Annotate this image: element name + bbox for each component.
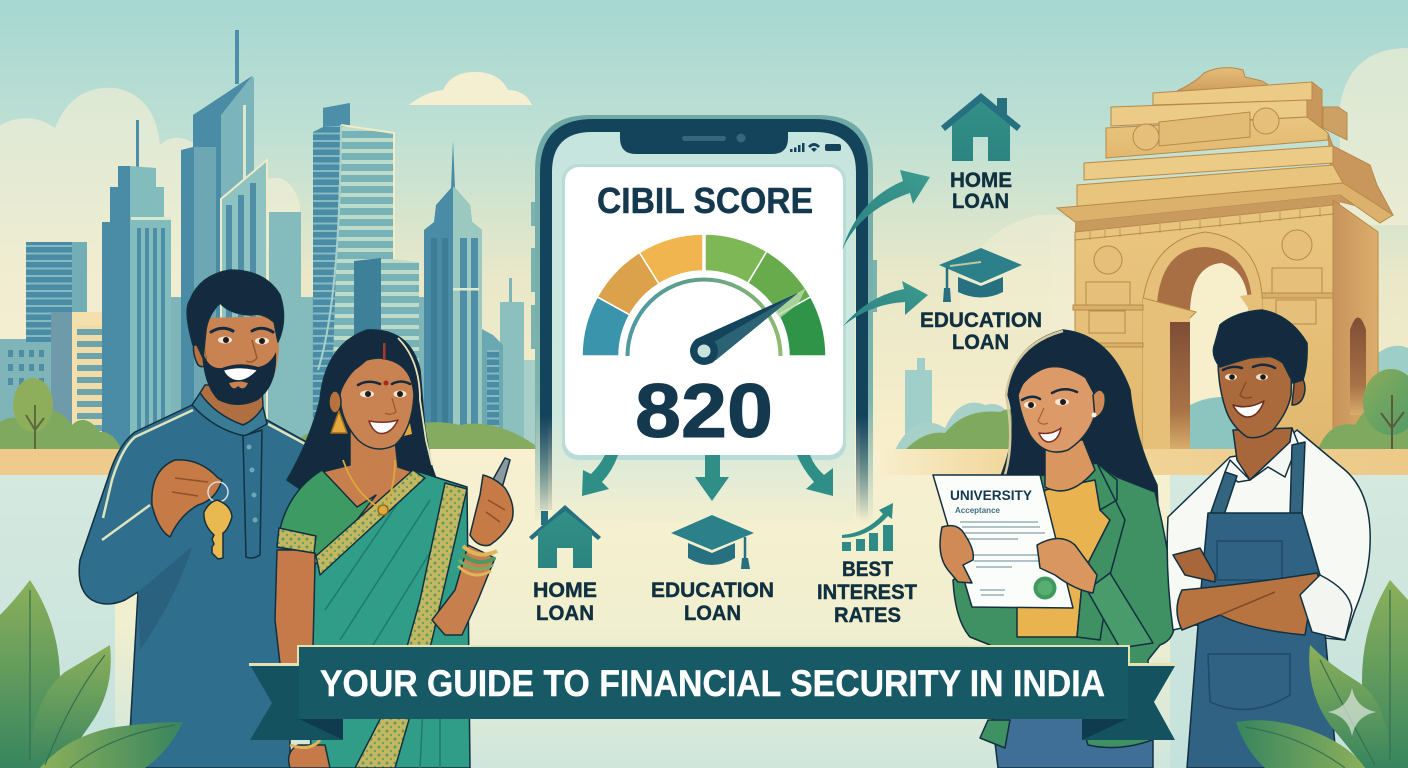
student: eyes — [1024, 398, 1069, 408]
banner: cream edge — [249, 645, 1175, 666]
woman: blouse trim — [277, 528, 316, 553]
gate: right panel details — [1262, 230, 1333, 324]
leaf: low — [1236, 720, 1365, 768]
gate: right pier — [1240, 293, 1262, 449]
gate: left pier — [1143, 298, 1196, 449]
building: cream block — [51, 312, 121, 450]
label: RATES — [834, 604, 901, 627]
apron man: neck — [1233, 428, 1292, 480]
phone: side buttons — [531, 202, 877, 349]
phone: outer frame — [535, 115, 873, 525]
building: tall angled tower — [181, 30, 267, 450]
apron man: smile — [1233, 401, 1264, 417]
label: EDUCATION — [920, 309, 1042, 332]
student: acceptance letter — [933, 475, 1073, 608]
gate: left panel details — [1073, 246, 1143, 347]
person: woman in saree — [275, 330, 513, 768]
leaf: middle — [30, 645, 111, 768]
heading: CIBIL SCORE: CIBIL SCORE — [597, 180, 813, 221]
woman: saree — [310, 470, 470, 768]
building: far right tower — [905, 358, 932, 440]
gate: side of upper tiers — [1328, 133, 1393, 215]
man: placket with buttons — [243, 430, 262, 558]
arrow: to interest rates below — [797, 455, 833, 496]
phone: dark bezel — [540, 119, 868, 520]
icon: gold key — [204, 500, 232, 559]
man: smile — [223, 368, 258, 381]
apron man: brows — [1223, 365, 1275, 370]
student: neck — [1045, 440, 1095, 491]
label — [651, 579, 774, 625]
woman: lower hand and bangles — [289, 740, 330, 768]
item: education loan upper — [920, 248, 1042, 354]
woman: smile — [369, 420, 398, 433]
apron man: nose — [1240, 382, 1252, 398]
gate: main body front — [1075, 205, 1333, 449]
building: small right blocks — [482, 278, 536, 452]
label — [920, 309, 1042, 354]
gauge — [582, 234, 826, 365]
icon: graduation cap — [671, 515, 754, 569]
student: ear — [1092, 390, 1105, 418]
student: jacket body — [953, 463, 1175, 700]
score card — [562, 164, 846, 460]
score value: 820: 820 — [635, 369, 773, 454]
gate: main body side — [1333, 200, 1378, 449]
leaf: low — [40, 722, 183, 768]
phone with CIBIL score — [531, 115, 877, 525]
building: tall slab tower — [313, 103, 394, 450]
city skyline — [0, 30, 536, 452]
ground: right sand band — [880, 449, 1408, 475]
woman: right arm — [432, 545, 495, 635]
student: sleeve — [1087, 573, 1153, 648]
label: INTEREST — [817, 581, 917, 604]
banner: main strip — [299, 647, 1128, 719]
student: left hand — [940, 526, 973, 583]
apron man: lower pocket — [1208, 654, 1290, 710]
banner: right tail — [1082, 666, 1175, 740]
apron man: eyes — [1225, 374, 1268, 380]
building: stepped tower — [102, 120, 171, 450]
student: face — [1018, 352, 1097, 452]
student: brows — [1022, 389, 1077, 400]
banner: folds — [299, 719, 1127, 740]
woman: nose — [385, 398, 396, 414]
bush: centre right — [905, 409, 1025, 450]
student: right lapel — [1077, 463, 1125, 640]
label: EDUCATION — [651, 579, 774, 602]
item: home loan upper — [941, 93, 1021, 213]
student: hair highlight — [1005, 331, 1063, 475]
man: ear — [193, 332, 207, 367]
arrow: to home loan below — [582, 455, 618, 496]
label: LOAN — [952, 190, 1009, 213]
ground: right field — [1150, 475, 1408, 768]
building: striped block — [26, 242, 87, 342]
student: smile — [1039, 428, 1061, 442]
letter: green seal — [1034, 576, 1056, 600]
hills and trees — [0, 358, 1408, 450]
man: shoulder piping — [102, 410, 307, 540]
banner: title text: YOUR GUIDE TO FINANCIAL SECURITY IN INDIA — [320, 663, 1105, 704]
watermark star — [1328, 688, 1376, 736]
gate: back side block — [1323, 107, 1347, 140]
apron man: face — [1218, 355, 1292, 438]
building: far left block — [0, 339, 60, 450]
gate: cornice — [1057, 183, 1393, 223]
label: LOAN — [684, 602, 741, 625]
gate: backdrop hills — [1370, 346, 1408, 449]
apron man: bib pocket — [1217, 541, 1282, 580]
woman: parting and bindi — [383, 343, 388, 386]
bush: left — [0, 410, 122, 450]
woman: saree folds — [325, 500, 450, 768]
woman: brows — [358, 382, 410, 385]
man: beard — [202, 350, 276, 405]
man: eyes — [218, 336, 269, 344]
man: face — [204, 316, 279, 403]
label: LOAN — [536, 602, 594, 625]
gate: central arch — [1143, 232, 1262, 449]
label: HOME — [533, 579, 597, 602]
man: nose — [246, 340, 257, 362]
item: home loan lower — [529, 505, 601, 625]
letter: subheading: Acceptance — [955, 506, 1001, 515]
phone: screen — [552, 132, 855, 525]
bush: right — [1318, 395, 1408, 449]
building: rear tower — [269, 212, 312, 450]
label: BEST — [842, 558, 893, 581]
tree: left — [13, 378, 53, 450]
label — [533, 579, 597, 625]
apron man: rolled sleeve — [1300, 575, 1352, 640]
arrow: to home loan right — [842, 170, 930, 250]
label: LOAN — [952, 331, 1009, 354]
ground: left field — [0, 475, 200, 768]
building: spired tower — [424, 140, 482, 450]
man: kurta shading — [138, 548, 192, 650]
item: education loan lower — [651, 515, 774, 625]
leaf: middle — [1309, 645, 1390, 768]
apron man: hair — [1213, 310, 1307, 383]
student: yellow top — [1017, 480, 1110, 637]
hill: centre right — [895, 403, 1012, 450]
apron man: ear — [1292, 375, 1305, 405]
student: nose — [1038, 408, 1048, 424]
man: collar — [192, 393, 267, 436]
person: man with house key — [79, 270, 312, 768]
icon: house — [529, 505, 601, 568]
leaf: tall — [1362, 580, 1408, 768]
woman: eyes — [360, 390, 406, 398]
leaf: tall — [0, 580, 60, 768]
foliage: bottom left leaves — [0, 580, 183, 768]
India Gate — [1057, 68, 1408, 449]
woman: hair front — [340, 340, 414, 395]
gate: small side arch — [1350, 318, 1366, 415]
icon: graduation cap — [939, 248, 1022, 302]
background sky — [0, 0, 1408, 450]
woman: hair — [287, 330, 440, 510]
woman: blouse — [277, 470, 376, 568]
apron man: collar — [1225, 428, 1298, 482]
man: neck — [200, 385, 263, 425]
icon: rising bars — [842, 503, 893, 551]
apron man: folded arms — [1173, 548, 1320, 635]
woman: left arm — [275, 550, 315, 690]
phone: status icons — [790, 143, 841, 152]
student: right hand — [1037, 538, 1097, 593]
woman: face — [340, 358, 414, 449]
student: hair — [1000, 330, 1158, 510]
tree: right — [1363, 369, 1408, 449]
banner: left tail — [250, 665, 343, 740]
label — [950, 169, 1012, 213]
arrow: to education loan right — [843, 281, 928, 326]
man: hair — [187, 270, 284, 358]
building: mid block — [354, 258, 419, 450]
student: jeans — [990, 700, 1153, 768]
label: HOME — [950, 169, 1012, 192]
woman: hair highlight — [398, 338, 432, 465]
woman: bangles — [458, 546, 497, 575]
student: jacket hem below banner — [980, 720, 1152, 748]
ground: centre lower field — [115, 449, 1170, 768]
gauge needle — [690, 288, 806, 365]
woman: shoulder border — [316, 470, 425, 575]
gate: top tiers — [1153, 82, 1312, 105]
letter: lines — [960, 522, 1050, 595]
man: brows — [211, 328, 273, 332]
bush: centre left — [290, 422, 535, 450]
arrow: to education loan below — [695, 455, 729, 501]
item: best interest rates — [817, 503, 917, 627]
man: beard cheek gap — [229, 381, 248, 388]
person: man in apron — [1167, 310, 1370, 768]
student: hair fringe — [1016, 339, 1100, 395]
woman: ear and earrings — [329, 391, 412, 436]
label — [817, 558, 917, 627]
letter: heading: UNIVERSITY — [950, 488, 1032, 503]
apron man: white shirt — [1167, 430, 1370, 640]
woman: raised hand with key — [470, 458, 513, 546]
apron man: straps — [1210, 442, 1305, 515]
phone: speaker and camera — [682, 134, 746, 142]
woman: necklace — [343, 460, 395, 510]
clouds — [0, 48, 1408, 380]
ground: left sand band — [0, 449, 125, 475]
foliage: bottom right leaves — [1236, 580, 1408, 768]
small cloud — [409, 72, 532, 105]
woman: saree gold border — [355, 483, 467, 768]
woman: chest and neck — [322, 430, 413, 520]
gate: dome — [1177, 68, 1270, 91]
icon: house — [941, 93, 1021, 161]
man: hand with key — [152, 460, 228, 537]
person: student with acceptance letter — [933, 330, 1175, 768]
man: kurta — [79, 405, 312, 768]
title banner — [249, 645, 1175, 740]
ground — [0, 449, 1408, 768]
building: low fill behind towers — [171, 297, 431, 450]
apron man: apron — [1187, 513, 1337, 768]
